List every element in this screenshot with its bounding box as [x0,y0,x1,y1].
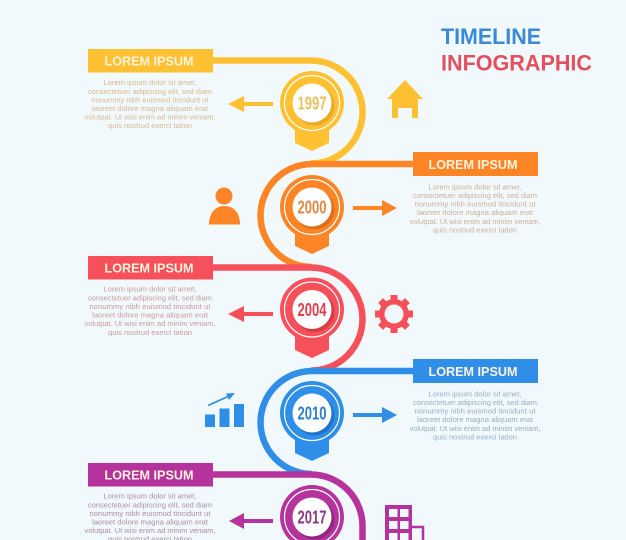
text block: yellow: quis nostrud exerci tation [108,121,192,130]
arrow: right blue [353,407,397,423]
text block: blue: volutpat. Ut wisi enim ad minim veniam, [410,424,540,433]
text block: purple: Lorem ipsum dolor sit amet, [104,492,196,500]
milestone: 2017 [84,463,423,540]
icon: bar chart [205,393,244,427]
title: TIMELINE [441,24,541,49]
badge: 2000: 2000 [298,198,326,218]
badge: 1997: 1997 [298,94,326,114]
text block: blue: quis nostrud exerci tation [433,432,517,442]
arrow: left purple [229,513,273,529]
text block: red [84,284,216,337]
badge: 2000 [280,175,344,254]
text block: red: consectetuer adipiscing elit, sed diam [88,294,212,302]
connector: orange [261,164,416,267]
text block: red: laoreet dolore magna aliquam erat [92,310,209,320]
connector: blue [261,371,416,474]
header: orange [413,152,538,176]
header: yellow: LOREM IPSUM [104,54,194,68]
connector: yellow [210,60,362,164]
arrow: left yellow [228,96,273,112]
icon: building [385,505,423,540]
text block: orange: consectetuer adipiscing elit, sed diam [413,191,537,200]
text block: red: Lorem ipsum dolor sit amet, [104,284,196,294]
header: orange: LOREM IPSUM [428,157,518,172]
arrow: right orange [353,200,397,216]
icon: gear [375,295,413,333]
milestone: 2004 [84,256,413,370]
header: purple: LOREM IPSUM [104,468,194,482]
text block: yellow [84,78,216,130]
milestone: 2010 [205,359,540,474]
text block: orange: volutpat. Ut wisi enim ad minim veniam, [410,217,540,226]
text block: purple: nonummy nibh euismod tincidunt ut [90,509,211,518]
badge: 1997 [280,71,344,151]
text block: blue: consectetuer adipiscing elit, sed diam [413,398,537,407]
text block: purple: volutpat. Ut wisi enim ad minim veniam, [84,526,216,535]
text block: red: nonummy nibh euismod tincidunt ut [90,302,211,311]
text block: yellow: nonummy nibh euismod tincidunt ut [92,96,209,104]
header: red: LOREM IPSUM [104,260,194,276]
text block: purple [84,492,216,540]
text block: yellow: laoreet dolore magna aliquam erat [92,104,209,113]
milestone: 2000 [209,152,540,267]
header: blue: LOREM IPSUM [428,364,518,379]
text block: blue: nonummy nibh euismod tincidunt ut [414,406,536,416]
badge: 2010: 2010 [298,404,326,424]
connector: red [210,268,362,370]
text block: orange: nonummy nibh euismod tincidunt ut [414,200,536,208]
title [441,24,592,76]
text block: orange: quis nostrud exerci tation [433,226,517,234]
header: yellow [88,49,213,72]
badge: 2004 [280,278,344,358]
title: INFOGRAPHIC [441,50,592,76]
text block: blue: laoreet dolore magna aliquam erat [417,415,534,424]
text block: red: volutpat. Ut wisi enim ad minim veniam, [84,319,216,328]
text block: blue [410,390,540,442]
text block: red: quis nostrud exerci tation [108,328,192,337]
badge: 2017: 2017 [298,508,326,528]
text block: purple: consectetuer adipiscing elit, sed diam [88,500,212,510]
text block: yellow: volutpat. Ut wisi enim ad minim veniam, [84,112,216,122]
text block: yellow: Lorem ipsum dolor sit amet, [104,78,196,87]
icon: person [209,188,240,224]
text block: yellow: consectetuer adipiscing elit, sed diam [88,87,212,96]
text block: purple: laoreet dolore magna aliquam erat [92,518,209,526]
badge: 2010 [280,381,344,461]
text block: orange [410,182,540,234]
milestone: 1997 [84,49,423,164]
header: red [88,256,213,280]
icon: house [387,80,423,118]
header: purple [88,463,213,486]
badge: 2017 [280,485,344,540]
text block: blue: Lorem ipsum dolor sit amet, [428,390,522,398]
text block: orange: laoreet dolore magna aliquam erat [417,208,534,217]
arrow: left red [228,306,273,322]
text block: orange: Lorem ipsum dolor sit amet, [428,182,522,192]
connector: purple [210,474,362,540]
header: blue [413,359,538,383]
badge: 2004: 2004 [298,300,326,320]
